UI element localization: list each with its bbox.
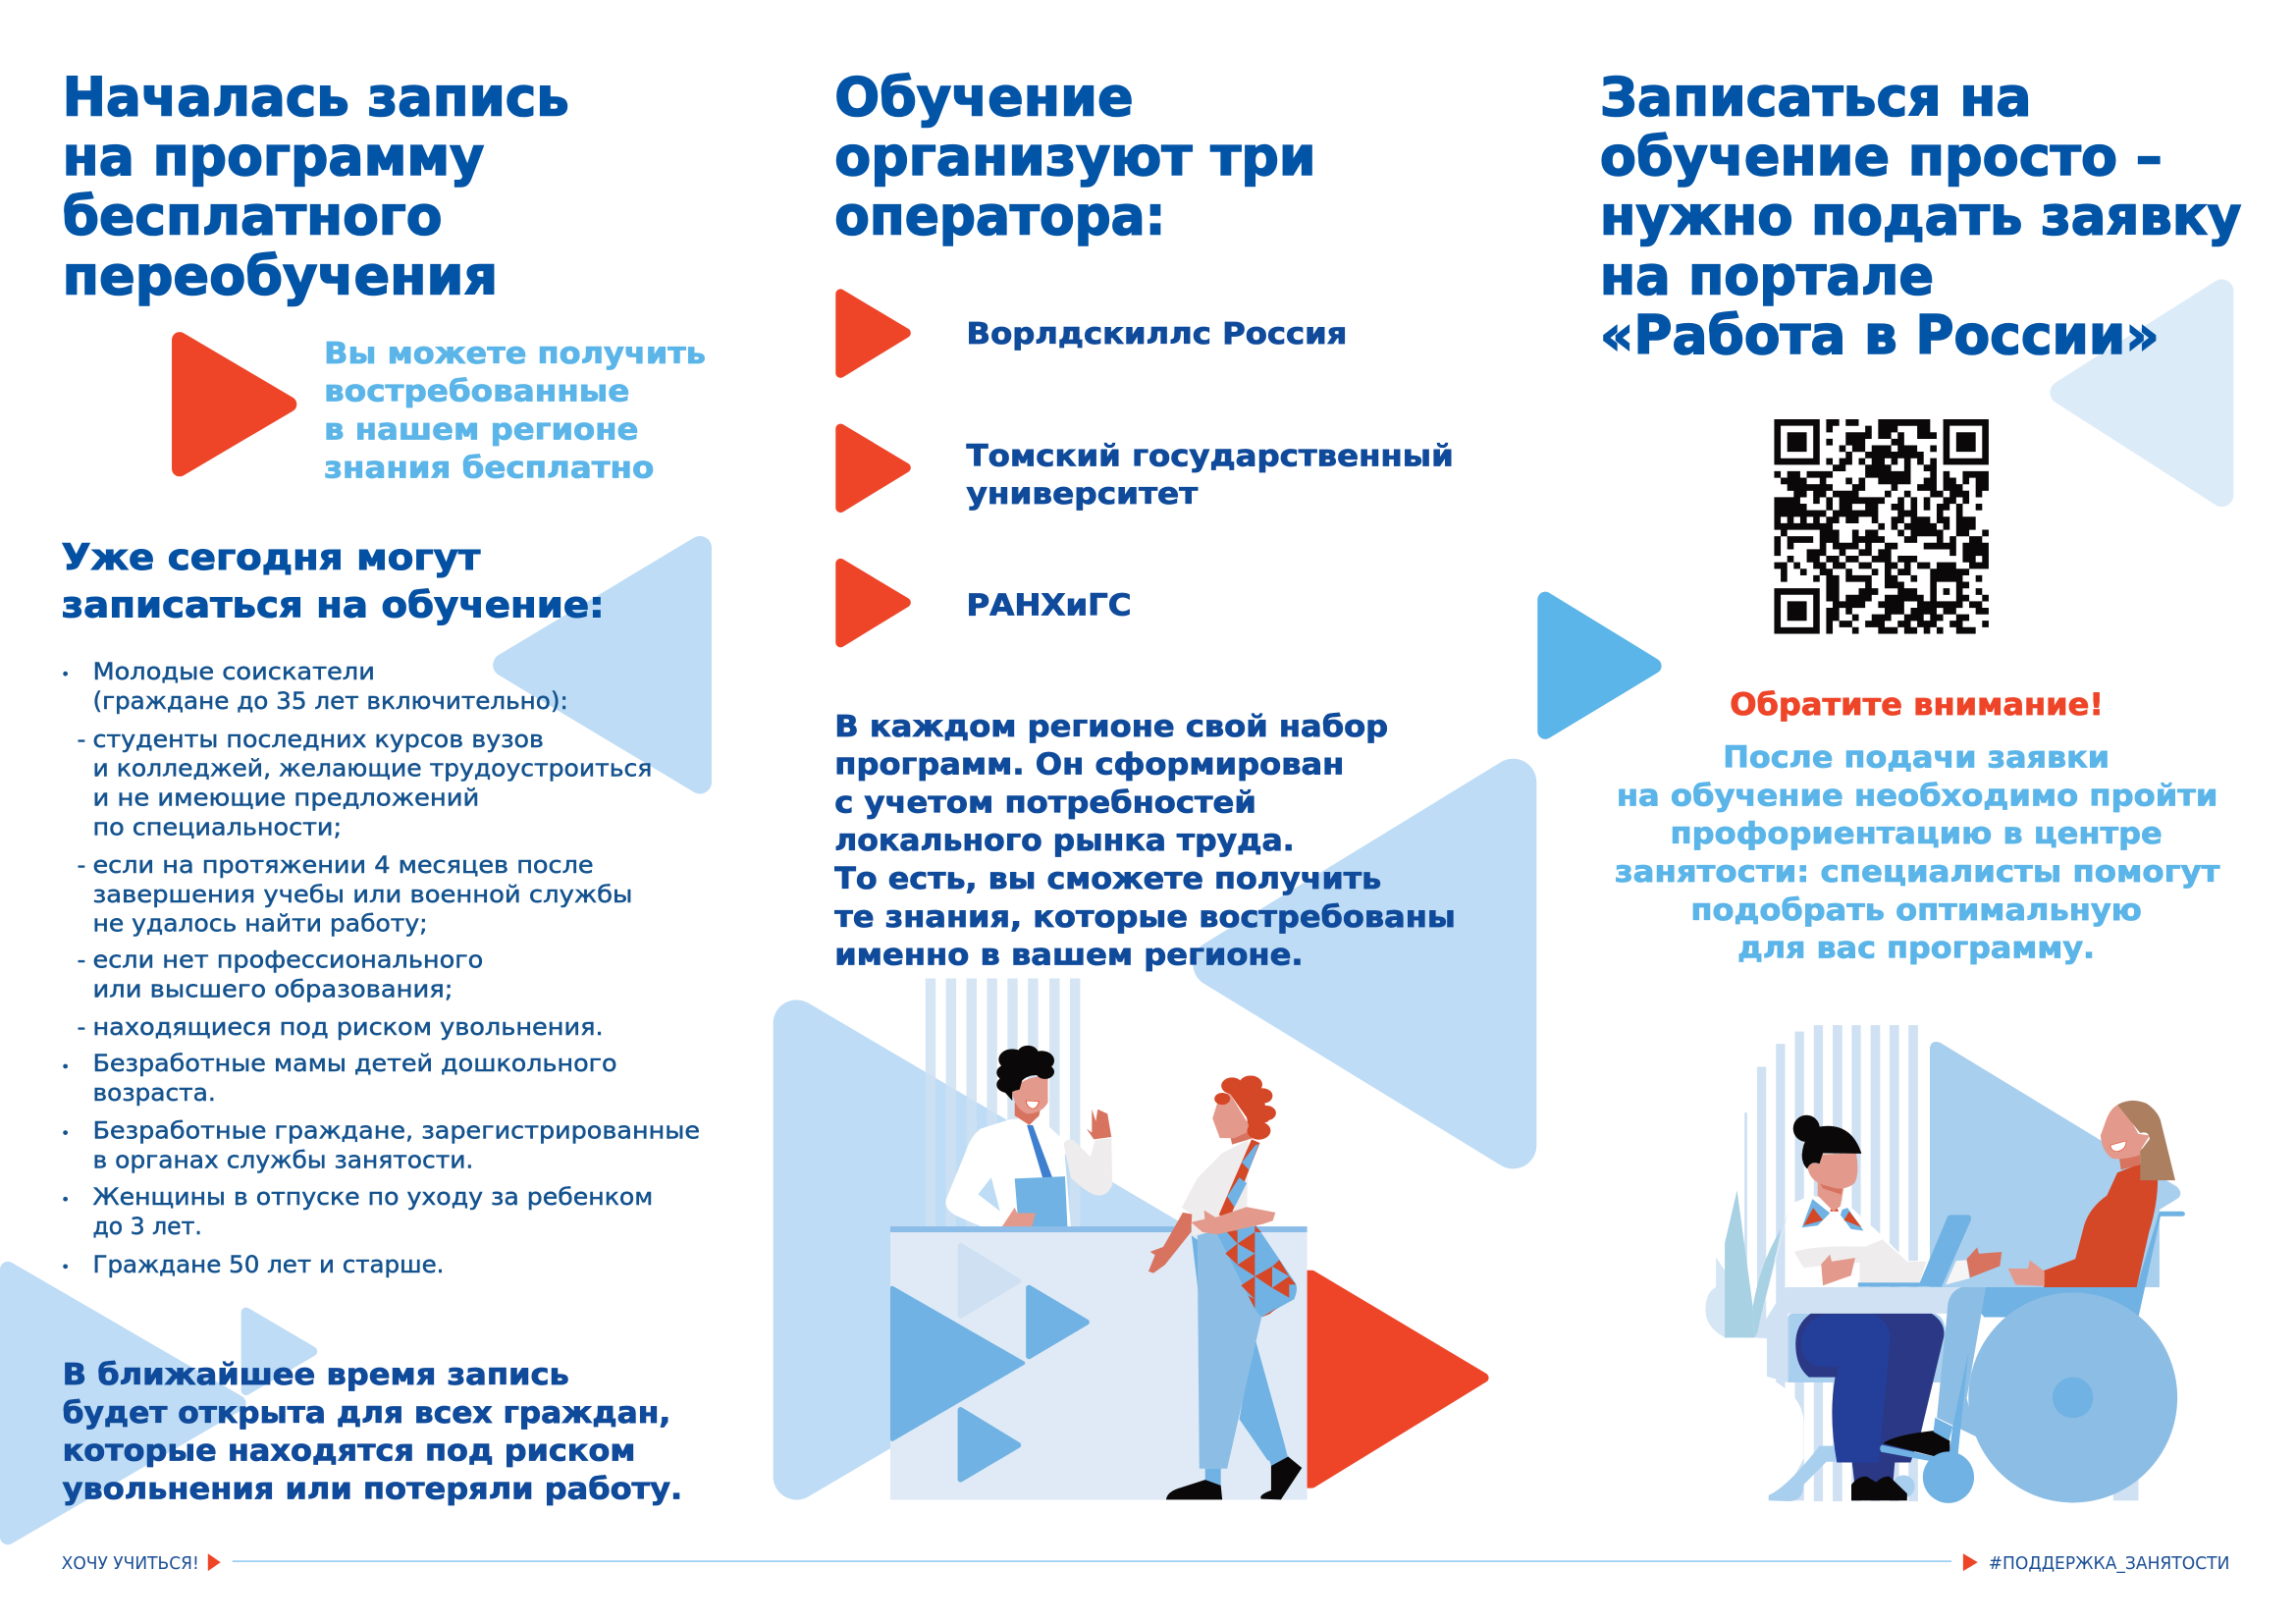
bullet list: eligible groups: и не имеющие предложений	[92, 784, 479, 811]
bullet list: eligible groups: Граждане 50 лет и старше.	[92, 1251, 444, 1278]
bullet list: eligible groups: находящиеся под риском увольнения.	[92, 1013, 604, 1041]
bullet list: eligible groups: в органах службы занятости.	[92, 1146, 473, 1173]
bag and arms of the woman	[1148, 1207, 1297, 1318]
desk triangle large	[892, 1288, 1023, 1439]
illustration: reception desk	[890, 978, 1484, 1500]
face	[1808, 1153, 1857, 1189]
heading: who can enrol: записаться на обучение:	[62, 584, 605, 626]
callout: free knowledge: в нашем регионе	[324, 413, 638, 448]
background stripes	[1744, 1025, 1918, 1501]
background stripes	[926, 978, 1080, 1230]
bullet list: eligible groups: (граждане до 35 лет включительно):	[92, 687, 568, 715]
title: column 1: на программу	[63, 125, 484, 188]
back leg	[1240, 1335, 1289, 1462]
footer: hashtag: #ПОДДЕРЖКА_ЗАНЯТОСТИ	[1989, 1554, 2229, 1574]
bullet list: eligible groups: если на протяжении 4 месяцев после	[92, 851, 594, 879]
title: column 2: оператора:	[834, 185, 1165, 247]
operator: Tomsk university: университет	[967, 477, 1199, 512]
heading: who can enrol	[62, 536, 605, 626]
text block: upcoming enrolment: увольнения или потеряли работу.	[63, 1473, 682, 1507]
chair base	[1769, 1446, 1910, 1501]
neck	[1818, 1176, 1844, 1212]
icon: operator triangle 2	[840, 429, 906, 508]
tie	[1027, 1125, 1052, 1177]
callout: free knowledge: востребованные	[324, 375, 629, 409]
bullet list: eligible groups: Молодые соискатели	[92, 658, 375, 685]
background triangle: centre large left	[796, 1023, 1181, 1477]
icon: blue triangle	[1545, 600, 1654, 731]
text block: career guidance note: После подачи заявки	[1723, 741, 2109, 776]
bullet list: eligible groups: возраста.	[92, 1079, 216, 1107]
icon: operator triangle 1	[840, 294, 906, 373]
person: woman body	[1166, 1075, 1302, 1499]
under-table panel	[1788, 1314, 1946, 1382]
operator: Tomsk university	[967, 439, 1454, 512]
shirt	[945, 1117, 1071, 1227]
hand on folder	[1001, 1208, 1036, 1227]
background triangle: left column list	[505, 548, 700, 783]
scarf	[1802, 1199, 1864, 1231]
operator list	[840, 294, 1454, 642]
bag pattern	[1225, 1225, 1296, 1318]
title: column 2: Обучение	[834, 65, 1134, 128]
operator: RANEPA: РАНХиГС	[967, 589, 1132, 623]
bullet list: eligible groups: Безработные граждане, зарегистрированные	[92, 1117, 700, 1145]
title: column 3: обучение просто –	[1600, 125, 2163, 188]
title: column 3: на портале	[1600, 244, 1934, 306]
text block: career guidance note: подобрать оптимальную	[1690, 893, 2142, 928]
arm dark	[1148, 1213, 1192, 1273]
icon: footer red triangle left	[208, 1553, 221, 1571]
operator: Tomsk university: Томский государственный	[967, 439, 1454, 473]
title: column 2	[834, 65, 1316, 247]
background triangle: left column bottom large	[8, 1270, 239, 1537]
text block: regional programmes: с учетом потребностей	[834, 785, 1256, 820]
background triangle: right column top	[2061, 291, 2221, 495]
operator: Worldskills: Ворлдскиллс Россия	[967, 317, 1347, 352]
hands	[1821, 1255, 1855, 1285]
text block: career guidance note: для вас программу.	[1737, 932, 2095, 966]
title: column 1: бесплатного	[63, 185, 442, 247]
bullet list: eligible groups: по специальности;	[92, 813, 342, 840]
hair	[1214, 1075, 1276, 1140]
trousers	[1198, 1228, 1261, 1469]
desk triangle lower	[961, 1410, 1018, 1480]
desk triangle upper	[1029, 1288, 1087, 1356]
laptop	[1919, 1215, 1971, 1285]
title: column 3: нужно подать заявку	[1600, 185, 2241, 247]
shoes	[1851, 1477, 1907, 1500]
wheel hub	[2053, 1378, 2093, 1418]
bullet list: eligible groups: -	[78, 947, 85, 974]
bullet list: eligible groups: -	[78, 1013, 85, 1041]
bullet list: eligible groups: Женщины в отпуске по уходу за ребенком	[92, 1183, 653, 1211]
table	[1754, 1287, 1970, 1382]
footer: left slogan: ХОЧУ УЧИТЬСЯ!	[62, 1554, 199, 1574]
blouse	[1182, 1136, 1252, 1235]
text block: regional programmes: те знания, которые востребованы	[834, 900, 1456, 935]
legs	[1795, 1314, 1944, 1463]
icon: operator triangle 3	[840, 564, 906, 642]
neck and face	[1015, 1103, 1041, 1125]
large wheel	[1968, 1292, 2177, 1502]
bullet list: eligible groups: Безработные мамы детей дошкольного	[92, 1050, 617, 1077]
callout: free knowledge	[324, 337, 706, 485]
text block: career guidance note: на обучение необходимо пройти	[1617, 779, 2217, 813]
heading: attention: Обратите внимание!	[1730, 687, 2104, 723]
heading: who can enrol: Уже сегодня могут	[62, 536, 481, 578]
bullet list: eligible groups: не удалось найти работу;	[92, 910, 428, 938]
text block: upcoming enrolment	[63, 1358, 682, 1507]
neck and face	[1230, 1125, 1254, 1145]
icon: footer red triangle right	[1963, 1553, 1978, 1571]
bullet list: eligible groups	[63, 658, 700, 1278]
cuff right	[1946, 1260, 1969, 1284]
text block: regional programmes: именно в вашем регионе.	[834, 939, 1304, 973]
face	[2101, 1104, 2150, 1159]
title: column 3	[1600, 65, 2241, 366]
text block: upcoming enrolment: которые находятся под риском	[63, 1435, 635, 1469]
text block: regional programmes: То есть, вы сможете получить	[834, 862, 1381, 896]
bullet list: eligible groups: или высшего образования;	[92, 975, 453, 1002]
white pot cover	[1722, 1337, 1803, 1503]
text block: career guidance note: занятости: специалисты помогут	[1615, 855, 2220, 890]
text block: upcoming enrolment: В ближайшее время запись	[63, 1358, 569, 1392]
text block: regional programmes: локального рынка труда.	[834, 824, 1295, 858]
icon: large red triangle	[1308, 1275, 1484, 1484]
title: column 1	[63, 65, 569, 306]
bag	[1217, 1225, 1297, 1318]
arm light	[1191, 1207, 1275, 1234]
leg rest	[1937, 1287, 1986, 1437]
shoes	[1166, 1480, 1222, 1499]
footrest frame	[1949, 1352, 1968, 1455]
hair	[1793, 1115, 1820, 1142]
raised hand	[1087, 1110, 1111, 1139]
hair	[2117, 1101, 2175, 1180]
bullet list: eligible groups: до 3 лет.	[92, 1213, 202, 1240]
text block: upcoming enrolment: будет открыта для всех граждан,	[63, 1396, 670, 1431]
small wheel	[1923, 1451, 1974, 1503]
text block: career guidance note	[1615, 741, 2220, 966]
person: left woman	[1756, 1115, 2002, 1500]
title: column 3: «Работа в России»	[1600, 303, 2160, 366]
illustration: consultation with wheelchair user	[1705, 1025, 2185, 1503]
text block: regional programmes: В каждом регионе свой набор	[834, 710, 1388, 744]
background triangle: left column bottom small	[246, 1313, 312, 1390]
callout: free knowledge: Вы можете получить	[324, 337, 706, 371]
desk	[890, 1227, 1308, 1500]
wheelchair seat and frame	[1961, 1212, 2185, 1318]
bullet list: eligible groups: если нет профессионального	[92, 947, 483, 974]
desk triangle pale	[961, 1246, 1018, 1316]
hair	[996, 1046, 1054, 1101]
bullet list: eligible groups: -	[78, 726, 85, 753]
QR code	[1774, 419, 1989, 633]
callout: free knowledge: знания бесплатно	[324, 451, 654, 485]
text block: regional programmes: программ. Он сформирован	[834, 748, 1344, 783]
title: column 3: Записаться на	[1600, 65, 2031, 128]
torso	[1787, 1196, 1928, 1287]
strap	[1219, 1139, 1259, 1218]
background triangle	[1930, 1042, 2180, 1287]
text block: career guidance note: профориентацию в центре	[1671, 817, 2163, 851]
title: column 1: переобучения	[63, 244, 498, 306]
folder	[1015, 1176, 1067, 1227]
title: column 1: Началась запись	[63, 65, 569, 128]
title: column 2: организуют три	[834, 125, 1316, 188]
bullet list: eligible groups: завершения учебы или военной службы	[92, 881, 632, 908]
bullet list: eligible groups: студенты последних курсов вузов	[92, 726, 544, 753]
neck	[2119, 1152, 2140, 1169]
background triangle: centre large right	[1216, 783, 1513, 1146]
text block: regional programmes	[834, 710, 1456, 973]
person: woman in wheelchair	[2008, 1101, 2175, 1287]
plant	[1705, 1257, 1727, 1338]
bullet list: eligible groups: -	[78, 851, 85, 879]
person: man behind desk	[945, 1046, 1112, 1227]
hand	[2008, 1260, 2045, 1286]
torso	[2044, 1164, 2158, 1287]
bullet list: eligible groups: и колледжей, желающие трудоустроиться	[92, 755, 652, 783]
icon: red play triangle	[180, 340, 289, 468]
